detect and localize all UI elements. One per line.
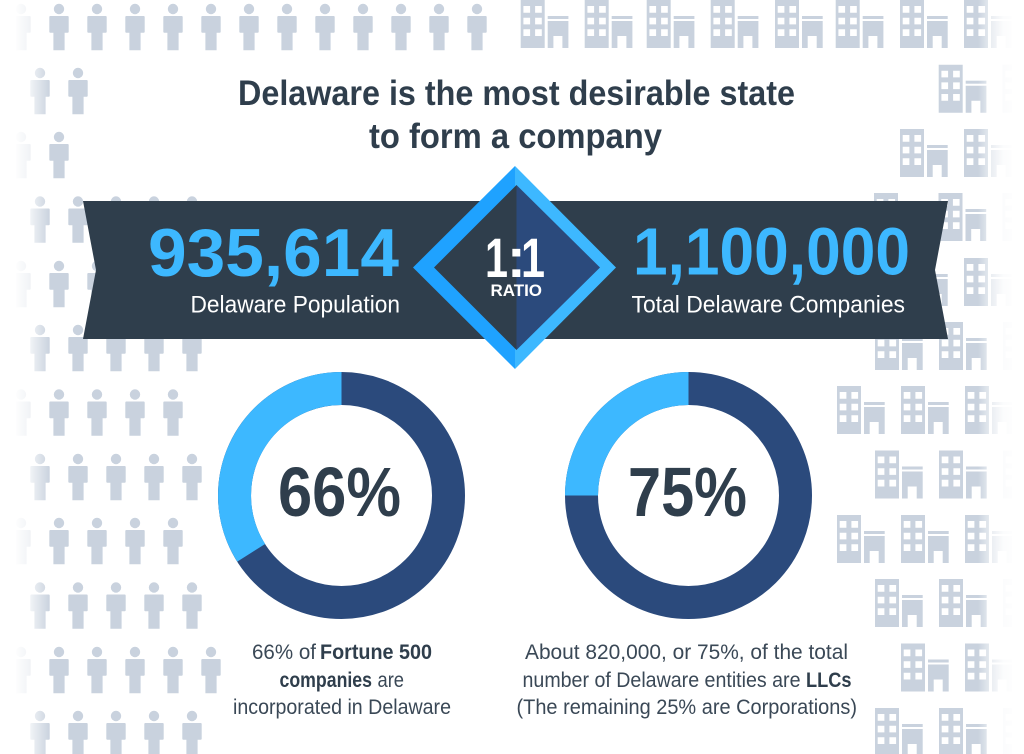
ratio label: RATIO xyxy=(490,281,542,300)
stat: total Delaware companies: Total Delaware Companies xyxy=(632,292,905,319)
stat: total Delaware companies: 1,100,000 xyxy=(633,214,910,290)
ratio value: 1 xyxy=(485,226,508,289)
caption: LLCs xyxy=(516,641,857,719)
stat: Delaware population: 935,614 xyxy=(148,215,399,291)
caption: Fortune 500 xyxy=(233,641,451,719)
title: to form a company xyxy=(369,117,662,156)
ratio diamond xyxy=(413,166,616,369)
donut value: 66%: 66% xyxy=(278,453,401,531)
ratio value: : xyxy=(507,226,526,289)
donut chart: 66% xyxy=(234,388,448,602)
ratio value xyxy=(485,226,545,289)
donut chart: 75% xyxy=(582,388,796,602)
caption: LLCs: About 820,000, or 75%, of the total xyxy=(525,641,848,664)
caption: Fortune 500: 66% of xyxy=(252,641,316,664)
caption: Fortune 500: companies xyxy=(280,669,372,692)
title xyxy=(238,74,795,156)
stat: total Delaware companies xyxy=(632,214,910,319)
caption: LLCs: (The remaining 25% are Corporations) xyxy=(516,696,857,719)
background pattern: buildings xyxy=(521,0,1024,754)
title: Delaware is the most desirable state xyxy=(238,74,795,113)
background pattern: people xyxy=(11,4,487,754)
stat: Delaware population: Delaware Population xyxy=(190,292,400,319)
caption: LLCs: LLCs xyxy=(806,669,852,692)
donut value: 75%: 75% xyxy=(628,453,747,531)
caption: LLCs: number of Delaware entities are xyxy=(522,669,800,692)
ratio value: 1 xyxy=(521,226,545,289)
ribbon banner xyxy=(83,201,948,339)
caption: Fortune 500: incorporated in Delaware xyxy=(233,696,451,719)
caption: Fortune 500: Fortune 500 xyxy=(320,641,432,664)
caption: Fortune 500: are xyxy=(378,669,404,692)
